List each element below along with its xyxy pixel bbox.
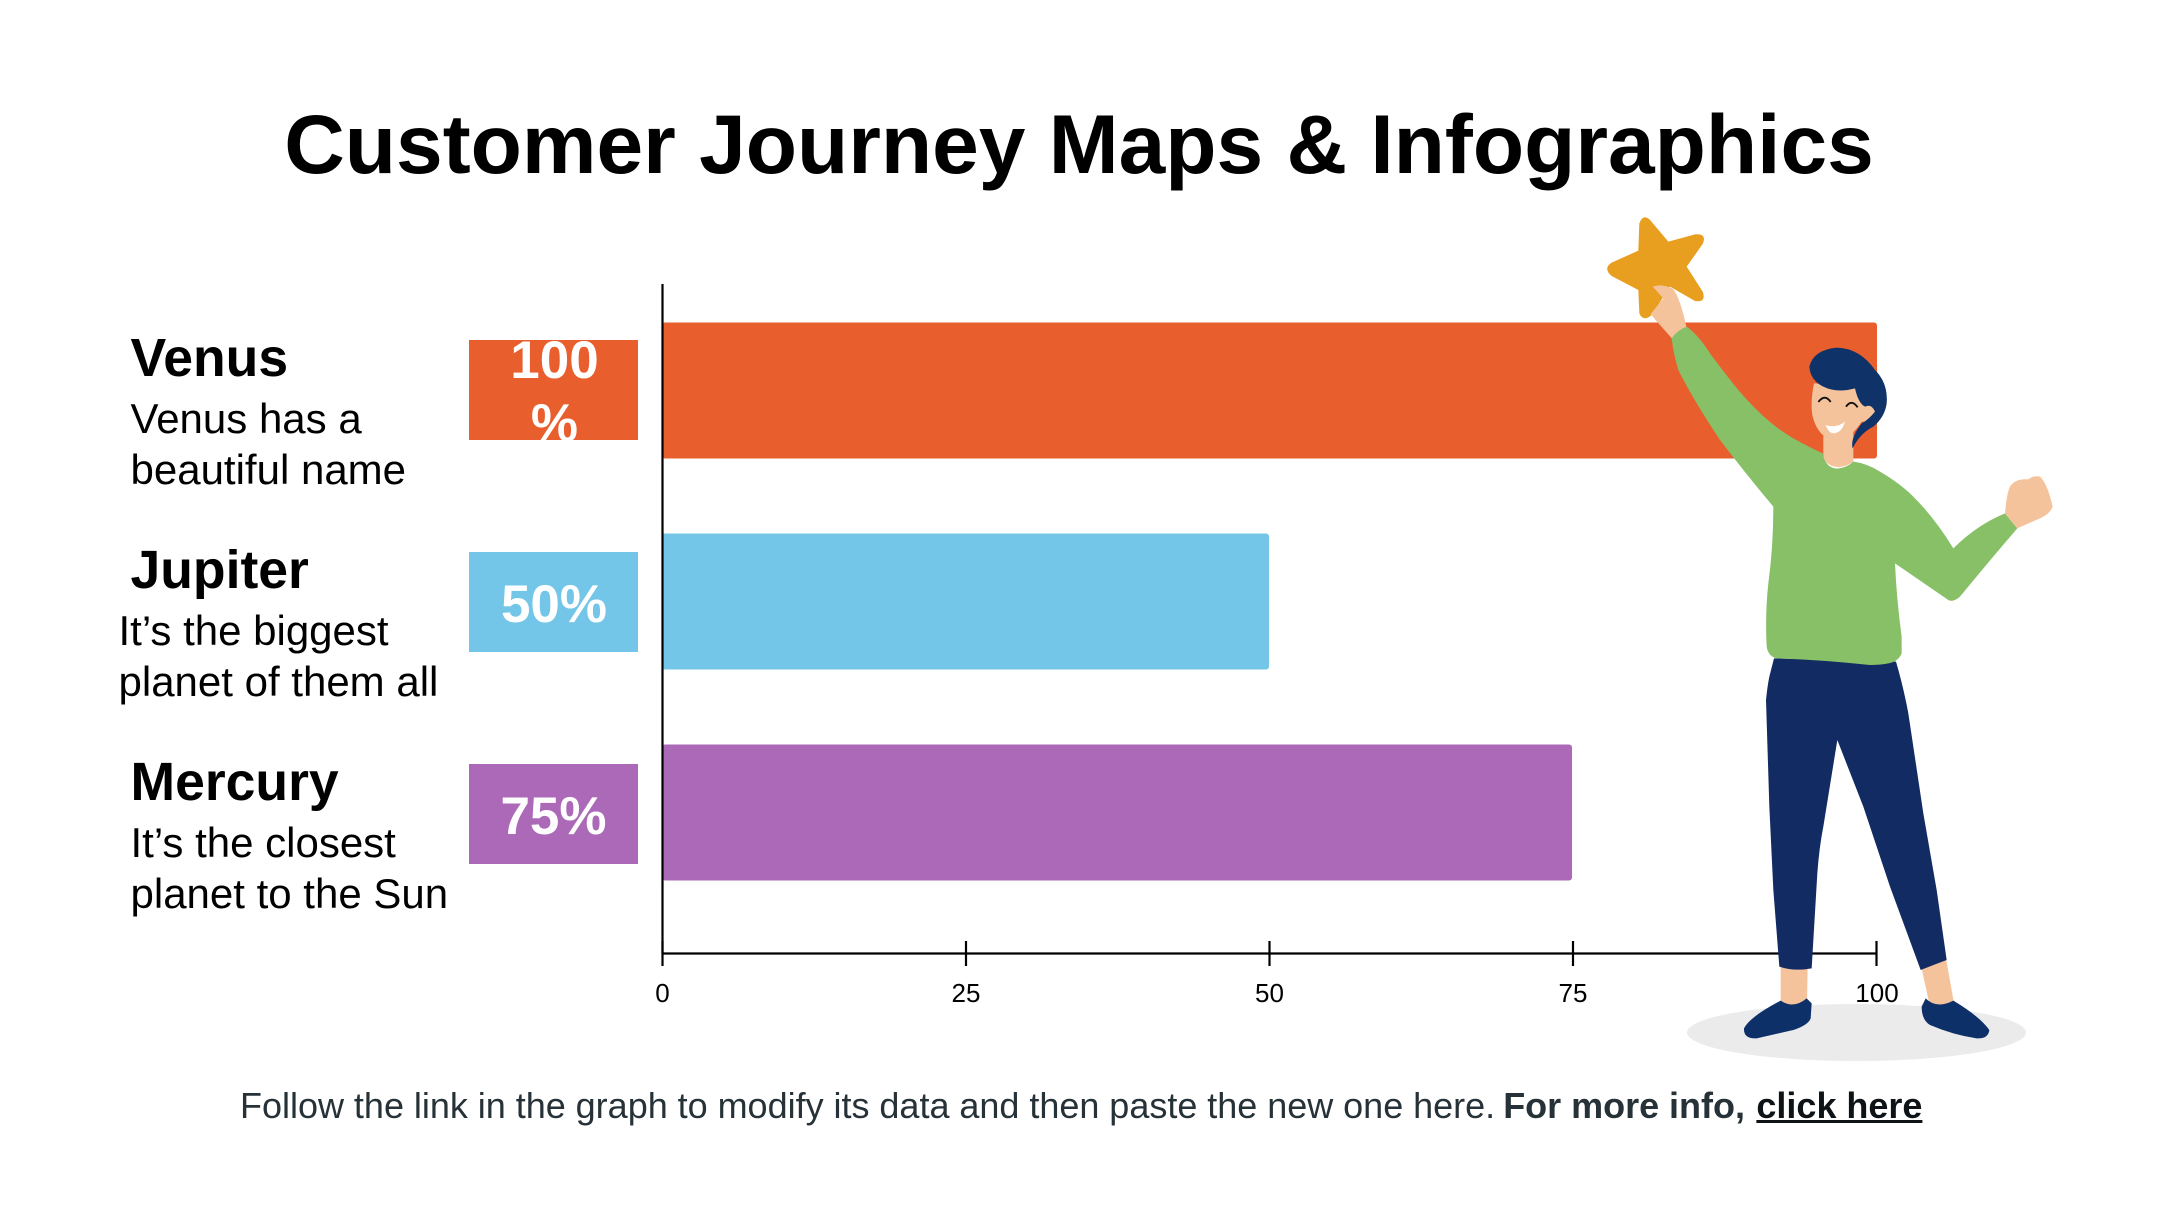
text: Venus description: Venus has a (130, 395, 362, 442)
badge: Jupiter 50%: 50% (501, 575, 607, 634)
text: Jupiter description: planet of them all (118, 658, 438, 705)
bar: Venus 100 (662, 322, 1877, 458)
axis labels: 0 (655, 978, 670, 1008)
text: Venus description (130, 395, 406, 493)
text: Mercury description: It’s the closest (130, 819, 396, 866)
heading: Jupiter: Jupiter (130, 541, 309, 600)
text: Jupiter description: It’s the biggest (118, 607, 389, 654)
panel: Jupiter row (118, 541, 638, 705)
face (1812, 383, 1876, 440)
ground shadow (1687, 1004, 2026, 1061)
axis labels: 100 (1855, 978, 1899, 1008)
axis labels (655, 978, 1899, 1008)
bar chart (655, 284, 1899, 1008)
legs and shoes (1744, 658, 1989, 1038)
title: Customer Journey Maps & Infographics (284, 96, 1874, 190)
badge: Mercury 75% (468, 764, 638, 864)
text: Mercury description: planet to the Sun (130, 870, 448, 917)
bar: Jupiter 50 (662, 534, 1269, 670)
smile (1826, 422, 1845, 433)
hair (1809, 348, 1887, 448)
panel: Venus row (130, 329, 638, 493)
footer note: Follow the link in the graph to modify its data and then paste the new one here.For more info, click here (240, 1085, 1922, 1126)
star (1607, 217, 1704, 318)
eyes (1818, 398, 1858, 407)
badge: Venus 100% (468, 340, 638, 440)
badge: Jupiter 50% (468, 552, 638, 652)
panel: Mercury row (130, 753, 638, 917)
badge: Mercury 75%: 75% (500, 787, 607, 846)
upper body (1607, 217, 2053, 665)
raised hand (1651, 285, 1687, 340)
heading: Venus: Venus (130, 329, 288, 388)
axis labels: 75 (1559, 978, 1587, 1008)
text: Jupiter description (118, 607, 438, 705)
sweater (1672, 327, 2017, 665)
chart axes (662, 284, 1876, 966)
text: Venus description: beautiful name (130, 446, 406, 493)
text: Mercury description (130, 819, 448, 917)
axis labels: 25 (952, 978, 980, 1008)
axis labels: 50 (1255, 978, 1284, 1008)
neck (1823, 430, 1853, 467)
heading: Mercury: Mercury (130, 753, 339, 812)
bar: Mercury 75 (662, 744, 1572, 880)
illustration: person holding star (1607, 217, 2053, 1061)
fist (2005, 476, 2053, 528)
